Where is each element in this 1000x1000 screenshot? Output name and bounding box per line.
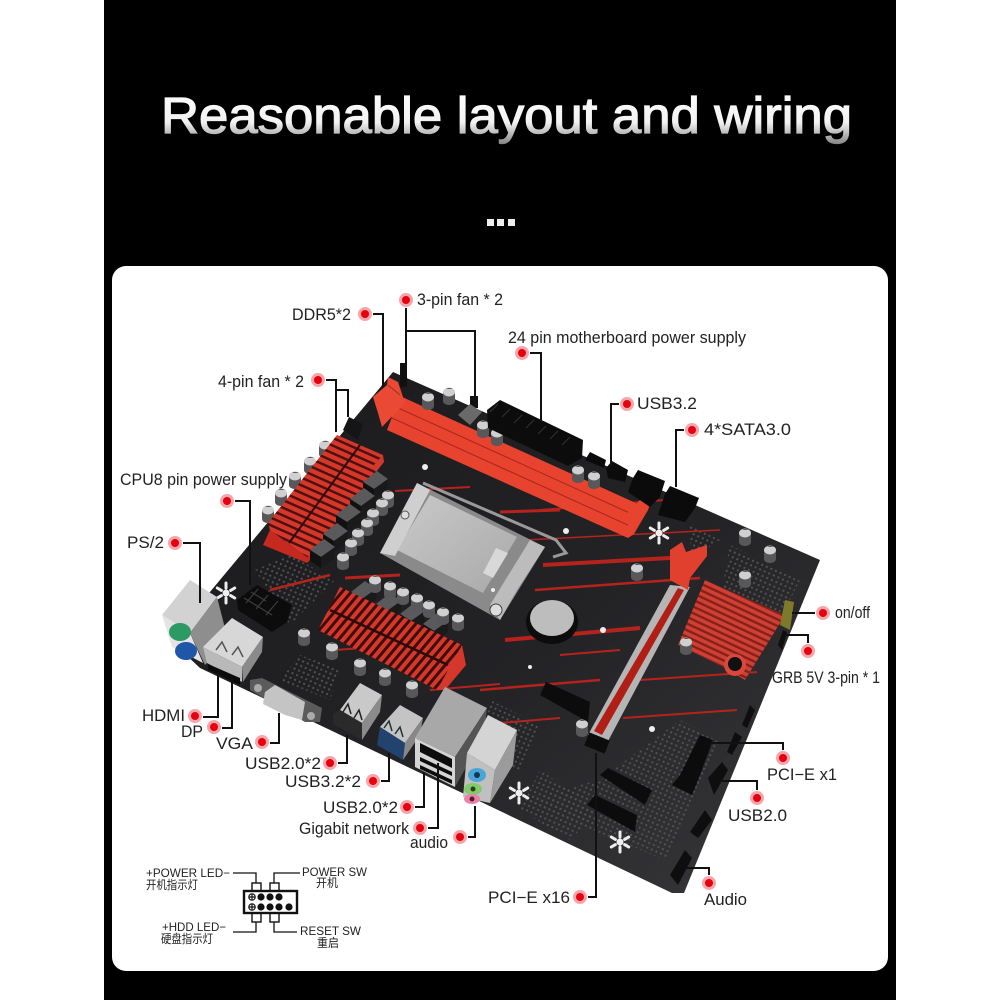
- black backdrop: [104, 0, 896, 1000]
- VRM chokes lower: [351, 581, 448, 642]
- callout: USB2.0*2 rear: USB2.0*2: [245, 755, 321, 773]
- USB3.2 header and SATA ports: [585, 452, 699, 522]
- VRM capacitors: [337, 490, 394, 570]
- power LED label: [146, 866, 230, 892]
- title: Reasonable layout and wiring: [161, 87, 852, 144]
- pcb: [170, 372, 820, 893]
- CMOS battery: [526, 600, 578, 644]
- VRM chokes: [310, 471, 388, 568]
- front panel pin diagram: [146, 865, 368, 950]
- capacitors near memory slots: [572, 466, 600, 489]
- callout: USB2.0*2 lan: USB2.0*2: [323, 799, 398, 817]
- motherboard illustration: [162, 363, 820, 893]
- pin header block: [244, 883, 297, 922]
- 8-pin CPU power: [237, 585, 292, 632]
- audio jacks: [463, 715, 517, 804]
- callout: Audio header: [702, 876, 747, 909]
- callout: HDMI: HDMI: [142, 707, 185, 725]
- callout: USB2.0 header: [728, 791, 787, 825]
- callout: 4-pin fan: 4-pin fan * 2: [218, 373, 304, 391]
- pin leader lines: [233, 873, 300, 932]
- on/off header: [780, 600, 794, 630]
- 3-pin fan headers: [400, 363, 478, 408]
- callout: audio jacks: audio: [410, 834, 448, 852]
- callout: DDR5: DDR5*2: [292, 306, 351, 324]
- mounting-hole stars: [217, 523, 668, 852]
- callout: USB3.2 header: USB3.2: [637, 395, 697, 413]
- USB 3.2 stack: [377, 705, 423, 760]
- tall capacitors: [576, 528, 776, 737]
- callout: 24 pin: 24 pin motherboard power supply: [508, 329, 747, 347]
- callout: 3-pin fan: 3-pin fan * 2: [417, 291, 503, 309]
- callout: GRB header: GRB 5V 3-pin * 1: [772, 669, 880, 687]
- capacitors left of heatsink: [262, 440, 331, 523]
- white mounting holes: [422, 464, 655, 732]
- 4-pin fan header: [343, 417, 363, 440]
- 24-pin power connector: [487, 400, 583, 466]
- capacitors below lower heatsink: [298, 628, 418, 698]
- DDR5 memory slots: [373, 377, 653, 538]
- callout: PS/2: PS/2: [127, 534, 164, 552]
- power switch label: POWER SW: [302, 865, 368, 879]
- PS/2 ports: [162, 580, 228, 665]
- callout: CPU 8 pin: [120, 471, 288, 508]
- callout: VGA: [216, 735, 269, 753]
- HDMI and DP ports: [203, 618, 263, 685]
- callout: VGA: VGA: [216, 735, 253, 753]
- HDD LED label: 硬盘指示灯: [161, 931, 213, 946]
- callout: 24 pin: [508, 329, 747, 360]
- reset switch label: RESET SW: [300, 924, 362, 938]
- red pcb traces: [270, 487, 757, 723]
- HDD LED label: [161, 920, 226, 946]
- RJ45 network port: [415, 687, 487, 787]
- callout: audio jacks: [410, 830, 467, 852]
- callout: GRB header: [772, 644, 880, 687]
- callout: Gigabit network: Gigabit network: [299, 820, 410, 838]
- callout: PCI-E x16: PCI−E x16: [488, 889, 570, 907]
- callout: DP: [181, 720, 221, 741]
- PCI-E x16 slot: [584, 542, 707, 754]
- M.2 slots and PCI-E x1 slot: [540, 682, 713, 832]
- CPU socket: [380, 483, 566, 620]
- VRM capacitors lower: [369, 576, 464, 631]
- reset switch label: 重启: [317, 936, 339, 950]
- callout: on/off: on/off: [835, 604, 870, 622]
- VGA port: [250, 678, 322, 722]
- power switch label: [302, 865, 368, 890]
- callout connector lines: [183, 308, 815, 897]
- pin headers right edge: [670, 630, 787, 885]
- callout: PCI-E x1: [767, 751, 837, 784]
- power LED label: 开机指示灯: [146, 877, 198, 892]
- power LED label: +POWER LED−: [146, 866, 230, 880]
- VRM heatsink left: [263, 435, 384, 563]
- callout: on/off: [816, 604, 870, 622]
- VRM heatsink lower: [318, 587, 466, 690]
- callout: PCI-E x1: PCI−E x1: [767, 766, 837, 784]
- callout: DP: DP: [181, 723, 203, 741]
- callout: CPU 8 pin: CPU8 pin power supply: [120, 471, 288, 489]
- small components top row: [422, 388, 503, 446]
- USB 2.0 stack: [333, 683, 382, 740]
- callout: USB3.2*2 rear: USB3.2*2: [285, 773, 361, 791]
- chipset heatsink: [678, 580, 785, 680]
- silkscreen texture patches: [255, 525, 800, 860]
- HDD LED label: +HDD LED−: [162, 920, 226, 934]
- callout: PS/2: [127, 534, 182, 552]
- reset switch label: [300, 924, 362, 950]
- decorative ellipsis: [487, 219, 515, 226]
- power switch label: 开机: [316, 876, 338, 890]
- callout: Audio header: Audio: [704, 891, 747, 909]
- callout: SATA: 4*SATA3.0: [704, 421, 791, 439]
- panel: white board card: [112, 266, 888, 971]
- callout: USB2.0 header: USB2.0: [728, 807, 787, 825]
